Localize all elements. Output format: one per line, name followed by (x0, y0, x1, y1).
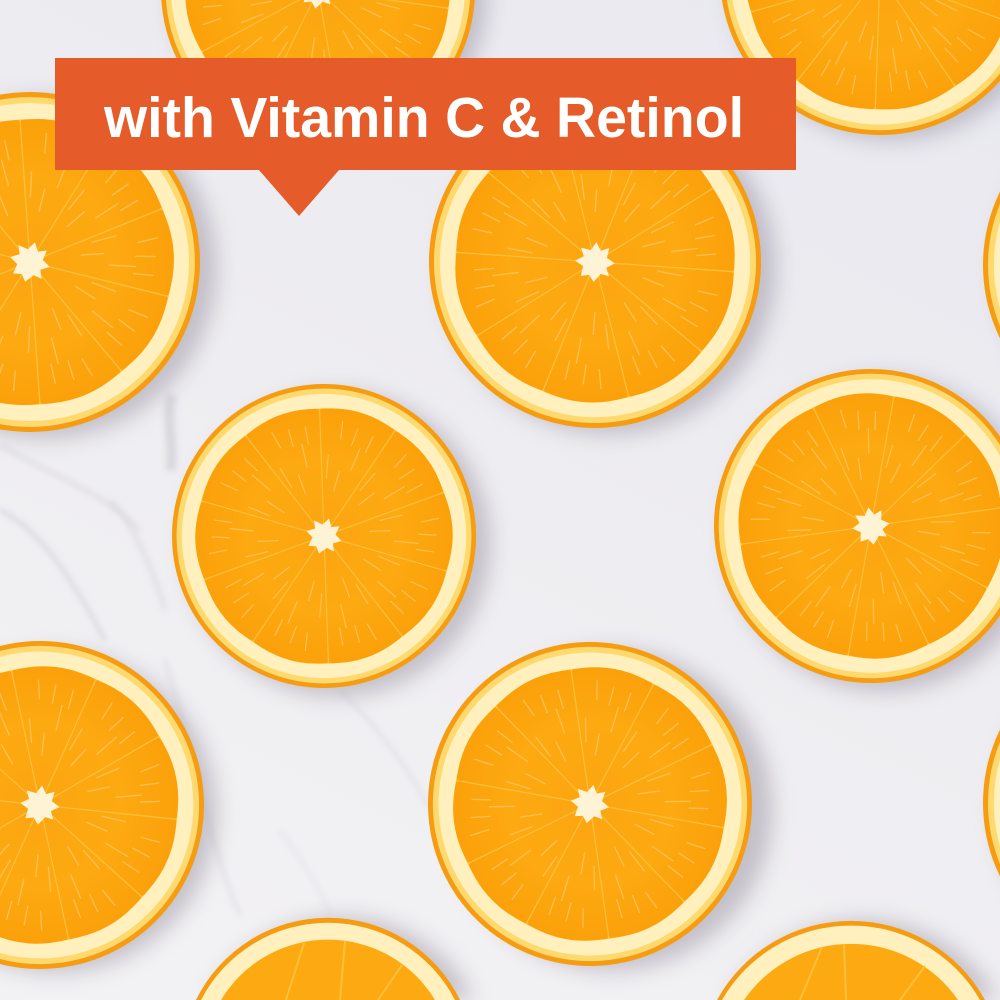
orange slice: upper left (0, 56, 236, 468)
orange slice: lower centre (402, 616, 778, 992)
banner shape with pointer (55, 58, 796, 216)
orange slice: right edge lower (983, 636, 1000, 970)
orange slice: bottom right (717, 921, 985, 1000)
orange slice: right edge upper (983, 98, 1000, 432)
orange slice: top centre (141, 0, 495, 167)
orange slice: upper centre (418, 85, 772, 439)
orange slice: top right (675, 0, 1000, 180)
orange slice: middle (136, 348, 512, 724)
orange slice: middle right (694, 349, 1000, 703)
orange slice: lower left (0, 625, 220, 985)
banner heading: with Vitamin C & Retinol (103, 86, 744, 150)
callout banner (55, 58, 796, 216)
orange slice: bottom centre (196, 918, 460, 1000)
